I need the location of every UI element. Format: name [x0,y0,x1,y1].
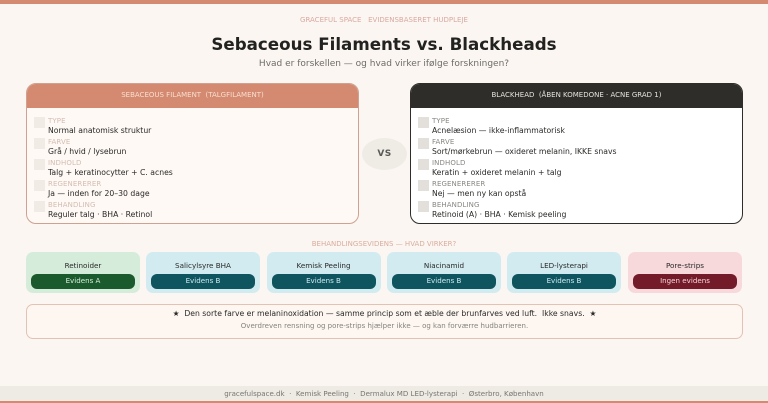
row: farve: FARVE [432,138,454,146]
row: farve: FARVE [48,138,70,146]
row: type: TYPE [432,117,450,125]
card: salicylsyre bha: Evidens B [186,276,220,285]
callout [26,304,743,339]
vs badge [362,138,407,170]
subtitle: Hvad er forskellen — og hvad virker ifølge forskningen? [259,59,509,69]
callout secondary text: Overdreven rensning og pore-strips hjælper ikke — og kan forværre hudbarrieren. [241,322,528,330]
row: behandling: BEHANDLING [432,201,480,209]
card: pore-strips: Pore-strips [666,261,704,270]
card: led-lysterapi: Evidens B [547,276,581,285]
footer [0,386,768,401]
card: pore-strips [628,252,742,293]
row: regenererer: Nej — men ny kan opstå [432,189,526,198]
footer: gracefulspace.dk · Kemisk Peeling · Dermalux MD LED-lysterapi · Østerbro, København [224,389,544,398]
card: retinoider: Evidens A [66,276,100,285]
row: indhold [418,159,562,177]
row: type [418,117,565,135]
panel: sebaceous filament [26,83,359,224]
row: regenererer: REGENERERER [48,180,101,188]
row: behandling: Retinoid (A) · BHA · Kemisk peeling [432,210,566,219]
row: behandling [418,201,566,219]
card: niacinamid: Niacinamid [424,261,464,270]
row: indhold: INDHOLD [432,159,465,167]
row: farve: Grå / hvid / lysebrun [48,147,126,156]
row: indhold: INDHOLD [48,159,81,167]
panel heading: blackhead [411,84,742,108]
card: retinoider [26,252,140,293]
card: kemisk peeling [266,252,380,293]
row: regenererer: REGENERERER [432,180,485,188]
section heading: evidence: BEHANDLINGSEVIDENS — HVAD VIRKER? [312,240,456,248]
row: indhold: Talg + keratinocytter + C. acnes [48,168,173,177]
row: indhold: Keratin + oxideret melanin + talg [432,168,562,177]
row: regenererer: Ja — inden for 20–30 dage [48,189,150,198]
row: behandling [34,201,152,219]
panel: blackhead [410,83,743,224]
card: kemisk peeling: Evidens B [306,276,341,285]
card: niacinamid: Evidens B [427,276,461,285]
card: kemisk peeling: Kemisk Peeling [296,261,350,270]
row: type: Acnelæsion — ikke-inflammatorisk [432,126,565,135]
card: led-lysterapi [507,252,621,293]
row: behandling: BEHANDLING [48,201,96,209]
row: farve [418,138,617,156]
row: type: TYPE [48,117,66,125]
row: type: Normal anatomisk struktur [48,126,151,135]
card: pore-strips: Ingen evidens [660,276,710,285]
card: led-lysterapi: LED-lysterapi [540,261,588,270]
panel heading: blackhead: BLACKHEAD (ÅBEN KOMEDONE · ACNE GRAD 1) [492,91,661,99]
row: type [34,117,152,135]
row: farve [34,138,126,156]
top accent bar [0,0,768,4]
panel heading: sebaceous filament [27,84,358,108]
row: indhold [34,159,173,177]
row: regenererer [418,180,526,198]
eyebrow label: GRACEFUL SPACE EVIDENSBASERET HUDPLEJE [300,16,468,24]
row: farve: Sort/mørkebrun — oxideret melanin, IKKE snavs [432,147,617,156]
card: salicylsyre bha: Salicylsyre BHA [175,261,231,270]
row: regenererer [34,180,150,198]
callout main text: ★ Den sorte farve er melaninoxidation — samme princip som et æble der brunfarves ved luft. Ikke snavs. ★ [173,309,596,318]
card: niacinamid [387,252,501,293]
panel heading: sebaceous filament: SEBACEOUS FILAMENT (TALGFILAMENT) [121,91,264,99]
card: retinoider: Retinoider [65,261,101,270]
row: behandling: Reguler talg · BHA · Retinol [48,210,152,219]
title: Sebaceous Filaments vs. Blackheads [211,34,557,54]
card: salicylsyre bha [146,252,260,293]
bottom accent bar [0,401,768,403]
vs badge: VS [377,149,392,159]
